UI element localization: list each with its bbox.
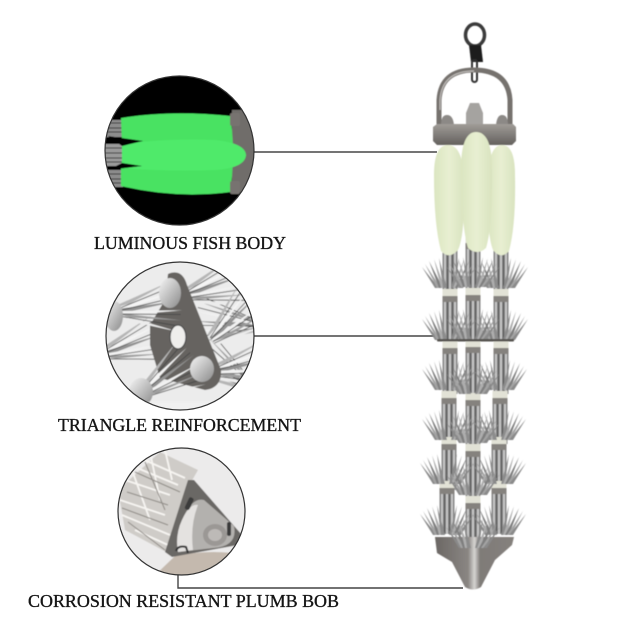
plumb bob	[435, 537, 514, 590]
left fish body	[434, 145, 464, 255]
circle outline	[106, 262, 254, 410]
label: corrosion resistant plumb bob: CORROSION RESISTANT PLUMB BOB	[28, 591, 339, 611]
leader line: plumb bob	[178, 575, 463, 588]
panel: luminous fish body callout	[94, 70, 286, 253]
spike tiers	[420, 257, 528, 549]
panel: triangle reinforcement callout	[58, 254, 301, 435]
lowest center spikes	[446, 518, 500, 548]
right fish body	[487, 145, 515, 255]
leader line: triangle reinforcement	[253, 335, 437, 337]
circle image: spikes and triangle plate	[106, 262, 254, 410]
side nuts	[441, 115, 508, 125]
product photo: squid jig	[420, 24, 528, 590]
circle outline	[105, 76, 254, 225]
circle image: plumb bob	[118, 448, 244, 574]
leader line: luminous fish body	[254, 151, 437, 153]
top nut	[466, 103, 483, 125]
label: triangle reinforcement: TRIANGLE REINFORCEMENT	[58, 415, 301, 435]
rods below fish bodies	[442, 236, 508, 290]
triangle plate	[150, 272, 221, 390]
mounting plate	[433, 124, 516, 145]
triangle plate line	[437, 339, 514, 342]
panel: corrosion resistant plumb bob callout	[28, 445, 339, 611]
bracket highlight	[440, 71, 474, 110]
U bracket	[439, 70, 510, 127]
label: luminous fish body: LUMINOUS FISH BODY	[94, 233, 286, 253]
circle image: glowing green bodies	[106, 76, 254, 224]
center fish body	[461, 132, 492, 252]
swivel and hook	[466, 24, 484, 82]
circle outline	[118, 448, 245, 575]
